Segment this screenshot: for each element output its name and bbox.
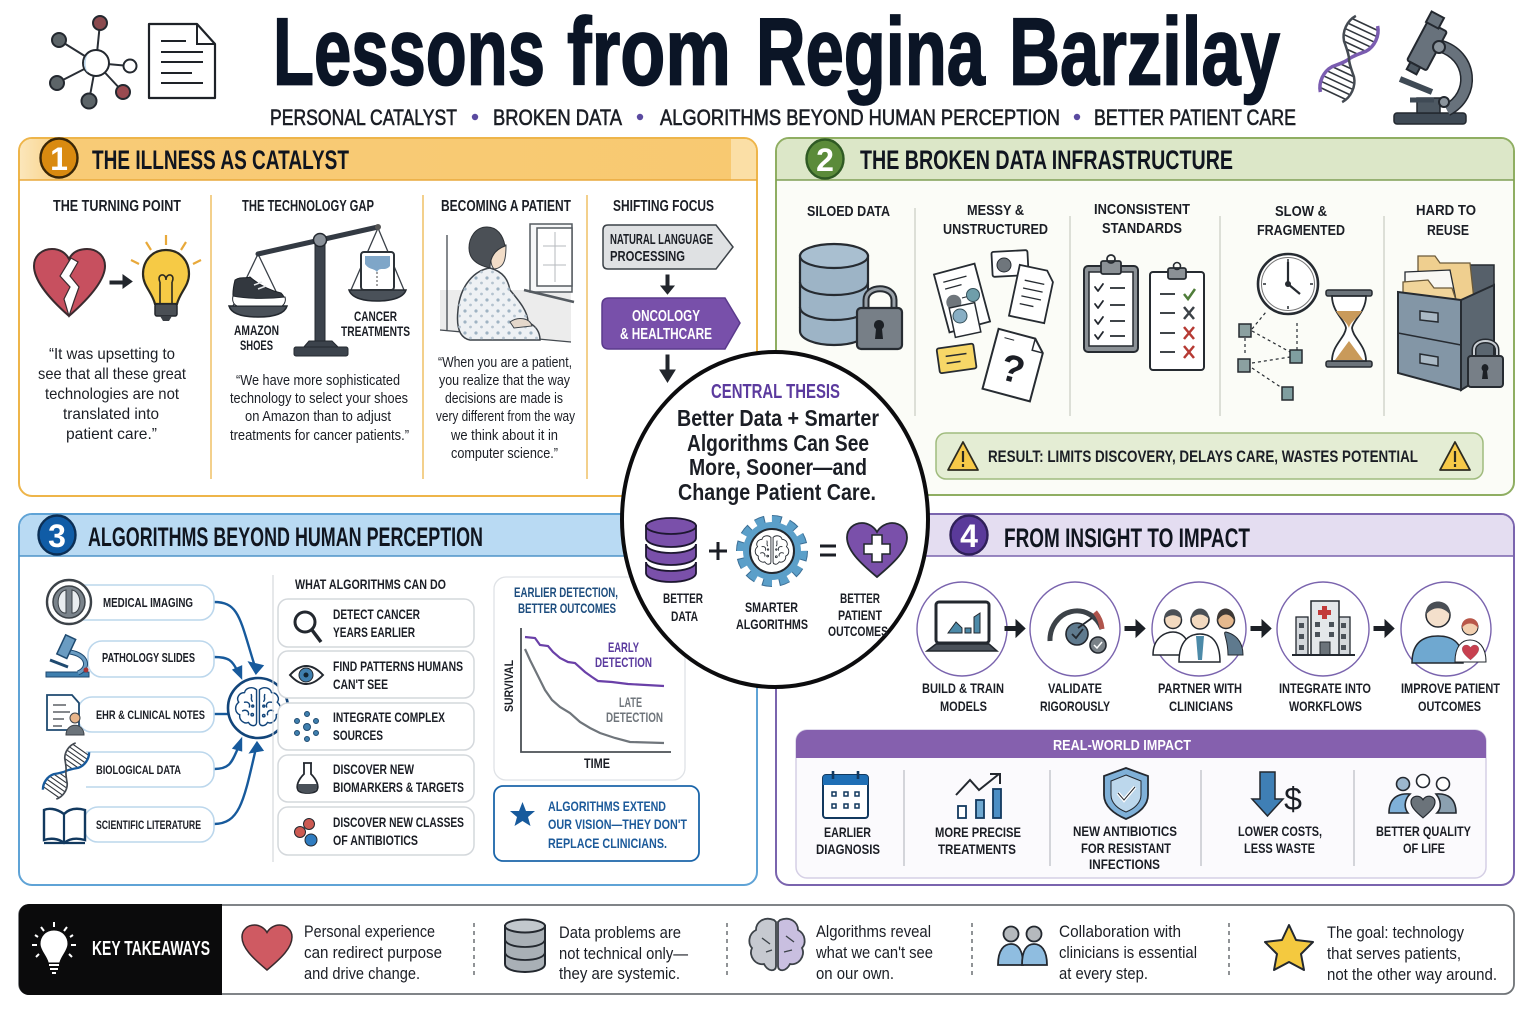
quote 2: on Amazon than to adjust <box>245 408 392 425</box>
thesis equation labels: DATA <box>671 608 698 624</box>
impact: new antibiotics: INFECTIONS <box>1089 856 1160 872</box>
step: partner with clinicians: CLINICIANS <box>1169 698 1233 714</box>
pill: medical imaging <box>47 580 214 624</box>
impact: lower costs <box>1238 772 1322 856</box>
takeaway: collaboration: clinicians is essential <box>1059 943 1197 962</box>
quote 3: very different from the way <box>436 408 575 425</box>
takeaway: algorithms reveal: what we can't see <box>815 943 933 962</box>
column: becoming a patient <box>436 198 575 462</box>
takeaway: algorithms reveal: on our own. <box>816 964 894 983</box>
pill: EHR and clinical notes <box>47 695 214 735</box>
thesis equation labels <box>663 590 888 639</box>
step: validate rigorously: RIGOROUSLY <box>1040 698 1110 714</box>
takeaway: personal experience: can redirect purpose <box>304 943 442 962</box>
card: discover biomarkers <box>278 755 474 802</box>
panel 2: the broken data infrastructure <box>776 138 1514 495</box>
step: build and train models: BUILD & TRAIN <box>922 680 1004 696</box>
quote 1: see that all these great <box>38 366 186 383</box>
tag: oncology and healthcare: & HEALTHCARE <box>620 326 712 343</box>
quote 3: “When you are a patient, <box>438 354 572 371</box>
header icon: document <box>149 24 215 98</box>
survival chart: SURVIVAL <box>502 660 516 712</box>
key takeaways label: KEY TAKEAWAYS <box>92 938 210 960</box>
survival chart: BETTER OUTCOMES <box>518 600 616 616</box>
card: integrate complex sources <box>278 703 474 750</box>
tag: natural language processing: PROCESSING <box>610 248 685 265</box>
takeaway: the goal: that serves patients, <box>1327 944 1461 963</box>
column: inconsistent standards <box>1084 201 1204 370</box>
step: partner with clinicians: PARTNER WITH <box>1158 680 1242 696</box>
column: siloed data: SILOED DATA <box>807 203 890 220</box>
pill: pathology slides: PATHOLOGY SLIDES <box>102 650 195 665</box>
icon: hourglass <box>1326 290 1372 367</box>
step: integrate into workflows: WORKFLOWS <box>1289 698 1362 714</box>
quote 3: decisions are made is <box>445 390 563 407</box>
number badge 3: 3 <box>48 518 66 554</box>
result banner: RESULT: LIMITS DISCOVERY, DELAYS CARE, WASTES POTENTIAL <box>988 447 1418 466</box>
impact: new antibiotics: NEW ANTIBIOTICS <box>1073 823 1177 839</box>
subtitle: PERSONAL CATALYST <box>270 105 457 130</box>
brain hub <box>228 678 288 738</box>
panel 1: the illness as catalyst <box>19 138 757 496</box>
callout: algorithms extend our vision <box>494 786 699 861</box>
column: the technology gap: THE TECHNOLOGY GAP <box>242 198 374 215</box>
takeaway: data problems: Data problems are <box>559 923 681 942</box>
column: slow and fragmented: FRAGMENTED <box>1257 222 1345 239</box>
card: discover antibiotics: DISCOVER NEW CLASSES <box>333 814 464 830</box>
takeaway: the goal <box>1265 923 1497 984</box>
icon: better data database <box>646 518 696 582</box>
step: integrate into workflows: INTEGRATE INTO <box>1279 680 1371 696</box>
result banner <box>936 433 1483 479</box>
subtitle: ALGORITHMS BEYOND HUMAN PERCEPTION <box>660 105 1060 130</box>
step: integrate into workflows <box>1277 582 1371 714</box>
icon: messy papers <box>934 250 1055 401</box>
takeaway: collaboration: Collaboration with <box>1059 922 1181 941</box>
quote 1: translated into <box>63 406 159 423</box>
impact: more precise treatments <box>935 774 1021 857</box>
impact: new antibiotics: FOR RESISTANT <box>1081 840 1171 856</box>
panel 2 heading: THE BROKEN DATA INFRASTRUCTURE <box>860 145 1233 175</box>
quote 2: “We have more sophisticated <box>236 372 400 389</box>
number badge 1 <box>40 138 78 178</box>
survival chart: LATE <box>619 694 642 710</box>
card: integrate complex sources: INTEGRATE COMPLEX <box>333 709 445 725</box>
pill: pathology slides <box>46 635 214 677</box>
tag: oncology and healthcare: ONCOLOGY <box>632 308 700 325</box>
step: build and train models <box>917 582 1007 714</box>
takeaway: personal experience <box>242 922 442 983</box>
survival chart: EARLIER DETECTION, <box>514 584 618 600</box>
pill: scientific literature: SCIENTIFIC LITERATURE <box>96 818 201 832</box>
impact: new antibiotics <box>1073 768 1177 872</box>
column: inconsistent standards: INCONSISTENT <box>1094 201 1190 218</box>
thesis statement: Algorithms Can See <box>687 430 869 456</box>
thesis equation labels: OUTCOMES <box>828 623 888 639</box>
quote 3: computer science.” <box>451 445 558 462</box>
column: hard to reuse <box>1398 202 1503 390</box>
step: improve patient outcomes <box>1401 582 1500 714</box>
step: improve patient outcomes: IMPROVE PATIENT <box>1401 680 1500 696</box>
quote 1: technologies are not <box>45 386 180 403</box>
impact: lower costs: $ <box>1284 781 1302 817</box>
takeaway: data problems: not technical only— <box>559 944 688 963</box>
survival chart: DETECTION <box>595 654 652 670</box>
central thesis label: CENTRAL THESIS <box>711 381 840 403</box>
arrow down <box>660 355 675 382</box>
arrow down <box>661 275 674 294</box>
takeaway: the goal: not the other way around. <box>1327 965 1497 984</box>
arrows into brain <box>214 602 262 824</box>
thesis equation labels: PATIENT <box>838 607 882 623</box>
number badge 4 <box>950 516 988 554</box>
icon: smarter algorithms gear <box>741 520 803 582</box>
arrow <box>110 275 132 288</box>
card: discover antibiotics <box>278 807 474 855</box>
column: messy and unstructured: MESSY & <box>967 202 1024 219</box>
icon: file cabinet with lock <box>1398 256 1503 390</box>
pill: biological data <box>40 741 214 801</box>
column: the turning point <box>34 198 201 443</box>
impact: lower costs: LOWER COSTS, <box>1238 823 1322 839</box>
labels: amazon shoes and cancer treatments: CANCER <box>354 308 397 324</box>
card: detect cancer: YEARS EARLIER <box>333 624 415 640</box>
callout: algorithms extend our vision: REPLACE CLINICIANS. <box>548 835 667 851</box>
card: detect cancer: DETECT CANCER <box>333 606 420 622</box>
icon: clock <box>1258 254 1318 314</box>
thesis statement: More, Sooner—and <box>689 454 867 480</box>
title: Regina <box>756 0 985 106</box>
survival chart: DETECTION <box>606 709 663 725</box>
icon: messy papers: ? <box>996 347 1029 393</box>
callout: algorithms extend our vision: ALGORITHMS EXTEND <box>548 798 666 814</box>
pill: scientific literature <box>44 807 214 843</box>
icon: light bulb <box>131 235 201 321</box>
icon: white light bulb <box>32 922 76 973</box>
card: find patterns: FIND PATTERNS HUMANS <box>333 658 463 674</box>
number badge 4: 4 <box>960 518 978 554</box>
number badge 2 <box>806 140 844 178</box>
header icon: network <box>50 16 136 108</box>
labels: amazon shoes and cancer treatments <box>234 308 410 353</box>
takeaway: collaboration <box>998 922 1197 983</box>
quote 2 <box>230 372 409 444</box>
quote 1: “It was upsetting to <box>49 346 175 363</box>
arrow <box>1374 620 1394 637</box>
card: find patterns: CAN'T SEE <box>333 676 388 692</box>
real-world impact box: REAL-WORLD IMPACT <box>1053 737 1191 754</box>
quote 1 <box>38 346 186 443</box>
takeaway: algorithms reveal <box>749 919 933 983</box>
thesis equation labels: SMARTER <box>745 599 798 615</box>
real-world impact box <box>796 730 1486 878</box>
pill: medical imaging: MEDICAL IMAGING <box>103 595 193 610</box>
column: inconsistent standards: STANDARDS <box>1102 220 1182 237</box>
quote 1: patient care.” <box>66 426 157 443</box>
column: the turning point: THE TURNING POINT <box>53 198 181 215</box>
survival chart: TIME <box>584 755 610 771</box>
labels: amazon shoes and cancer treatments: AMAZON <box>234 322 279 338</box>
step: validate rigorously <box>1030 582 1120 714</box>
step: build and train models: MODELS <box>940 698 987 714</box>
panel 3 heading: ALGORITHMS BEYOND HUMAN PERCEPTION <box>88 522 483 552</box>
illustration: patient at window <box>440 224 574 342</box>
column: siloed data <box>800 203 902 349</box>
icon: star <box>510 802 535 826</box>
takeaway: the goal: The goal: technology <box>1327 923 1464 942</box>
card: discover biomarkers: BIOMARKERS & TARGETS <box>333 779 464 795</box>
subtitle: BETTER PATIENT CARE <box>1094 105 1296 130</box>
column: hard to reuse: REUSE <box>1427 222 1469 239</box>
icon: balance scale <box>229 224 406 356</box>
card: integrate complex sources: SOURCES <box>333 727 383 743</box>
card: detect cancer <box>278 599 474 647</box>
impact: more precise treatments: MORE PRECISE <box>935 824 1021 840</box>
plus sign <box>709 542 727 560</box>
number badge 3 <box>38 516 76 554</box>
thesis equation labels: ALGORITHMS <box>736 616 808 632</box>
pill: biological data: BIOLOGICAL DATA <box>96 763 181 777</box>
heading: what algorithms can do: WHAT ALGORITHMS CAN DO <box>295 576 446 592</box>
subtitle <box>270 105 1296 130</box>
survival chart <box>494 577 685 780</box>
arrow <box>1125 620 1145 637</box>
step: partner with clinicians <box>1152 582 1246 714</box>
column: messy and unstructured <box>934 202 1055 401</box>
panel 4 heading: FROM INSIGHT TO IMPACT <box>1004 523 1250 553</box>
column: messy and unstructured: UNSTRUCTURED <box>943 221 1048 238</box>
quote 3 <box>436 354 575 462</box>
column: slow and fragmented <box>1238 203 1372 400</box>
equals sign <box>820 546 836 555</box>
pill: EHR and clinical notes: EHR & CLINICAL NOTES <box>96 708 205 722</box>
impact: earlier diagnosis: EARLIER <box>824 824 871 840</box>
header icon: DNA helix <box>1316 14 1382 104</box>
tag: natural language processing <box>603 225 733 269</box>
panel 1 heading: THE ILLNESS AS CATALYST <box>92 145 349 175</box>
takeaway: data problems: they are systemic. <box>559 964 680 983</box>
takeaway: collaboration: at every step. <box>1059 964 1148 983</box>
subtitle: BROKEN DATA <box>493 105 622 130</box>
title <box>273 0 1280 106</box>
icon: fragmented nodes <box>1238 312 1302 400</box>
title: Lessons <box>273 0 545 106</box>
step: improve patient outcomes: OUTCOMES <box>1418 698 1481 714</box>
icon: warning left <box>948 442 978 470</box>
title: from <box>567 0 731 106</box>
takeaway: algorithms reveal: Algorithms reveal <box>816 922 931 941</box>
header icon: microscope <box>1394 11 1467 124</box>
icon: better patient outcomes heart <box>847 523 907 577</box>
labels: amazon shoes and cancer treatments: SHOES <box>240 337 273 353</box>
quote 2: technology to select your shoes <box>230 390 408 407</box>
impact: better quality of life <box>1376 774 1472 856</box>
panel 4: from insight to impact <box>776 514 1514 885</box>
quote 3: you realize that the way <box>439 372 570 389</box>
takeaway: data problems <box>505 920 688 983</box>
thesis equation labels: BETTER <box>840 590 880 606</box>
thesis statement: Better Data + Smarter <box>677 405 879 431</box>
title: Barzilay <box>1009 0 1280 106</box>
icon: broken heart <box>34 249 105 316</box>
survival chart: EARLY <box>608 639 639 655</box>
column: slow and fragmented: SLOW & <box>1275 203 1327 220</box>
impact: better quality of life: BETTER QUALITY <box>1376 823 1472 839</box>
callout: algorithms extend our vision: OUR VISION—THEY DON'T <box>548 816 687 832</box>
impact: earlier diagnosis <box>816 771 880 857</box>
quote 3: we think about it in <box>450 427 558 444</box>
impact: more precise treatments: TREATMENTS <box>938 841 1016 857</box>
tag: oncology and healthcare <box>602 298 740 349</box>
column: the technology gap <box>229 198 410 444</box>
card: discover antibiotics: OF ANTIBIOTICS <box>333 832 418 848</box>
impact: lower costs: LESS WASTE <box>1244 840 1315 856</box>
icon: warning right <box>1440 442 1470 470</box>
takeaway: personal experience: Personal experience <box>304 922 435 941</box>
step: validate rigorously: VALIDATE <box>1048 680 1102 696</box>
column: shifting focus: SHIFTING FOCUS <box>613 198 714 215</box>
central thesis circle <box>622 352 928 687</box>
takeaway: personal experience: and drive change. <box>304 964 420 983</box>
quote 2: treatments for cancer patients.” <box>230 427 409 444</box>
impact: better quality of life: OF LIFE <box>1403 840 1445 856</box>
key takeaways bar <box>19 904 1514 995</box>
card: find patterns <box>278 651 474 698</box>
thesis statement <box>677 405 879 505</box>
thesis statement: Change Patient Care. <box>678 479 876 505</box>
number badge 2: 2 <box>816 142 834 178</box>
icon: database with lock <box>800 244 902 349</box>
card: discover biomarkers: DISCOVER NEW <box>333 761 415 777</box>
labels: amazon shoes and cancer treatments: TREATMENTS <box>341 323 410 339</box>
icon: clipboards <box>1084 255 1204 370</box>
number badge 1: 1 <box>50 141 68 177</box>
impact: earlier diagnosis: DIAGNOSIS <box>816 841 880 857</box>
thesis equation labels: BETTER <box>663 590 703 606</box>
panel 3: algorithms beyond human perception <box>19 514 757 885</box>
arrow <box>1251 620 1271 637</box>
column: shifting focus <box>602 198 740 382</box>
data sources <box>40 580 288 843</box>
column: hard to reuse: HARD TO <box>1416 202 1476 219</box>
arrow <box>1005 620 1025 637</box>
tag: natural language processing: NATURAL LANGUAGE <box>610 231 713 248</box>
column: becoming a patient: BECOMING A PATIENT <box>441 198 571 215</box>
